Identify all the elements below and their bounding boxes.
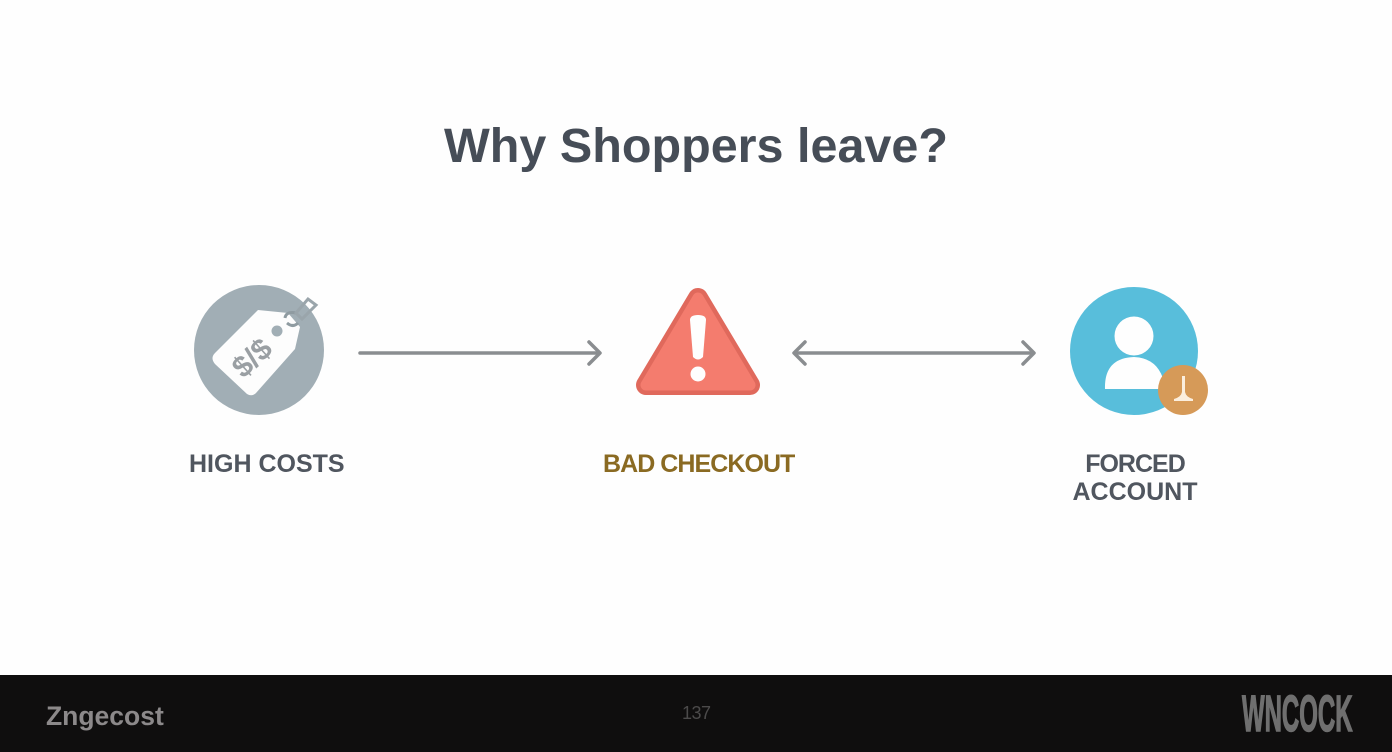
- footer logo left: Zngecost: [46, 701, 164, 731]
- label: high costs: HIGH COSTS: [189, 450, 345, 478]
- footer bar: [0, 675, 1392, 752]
- label: forced account: ACCOUNT: [1072, 478, 1198, 506]
- page number: 137: [682, 703, 711, 723]
- footer logo right: WNCOCK: [1242, 685, 1353, 742]
- icon: user account with badge: [1070, 287, 1208, 415]
- label: forced account: [1072, 450, 1198, 506]
- icon: price tag: [194, 285, 324, 415]
- arrow: double headed: [794, 342, 1034, 364]
- title: Why Shoppers leave?: [444, 119, 948, 173]
- label: bad checkout: BAD CHECKOUT: [603, 450, 794, 478]
- label: forced account: FORCED: [1085, 450, 1185, 478]
- arrow: high costs to bad checkout: [360, 342, 600, 364]
- icon: price tag: $/$: [226, 332, 279, 385]
- icon: warning triangle: [646, 298, 750, 385]
